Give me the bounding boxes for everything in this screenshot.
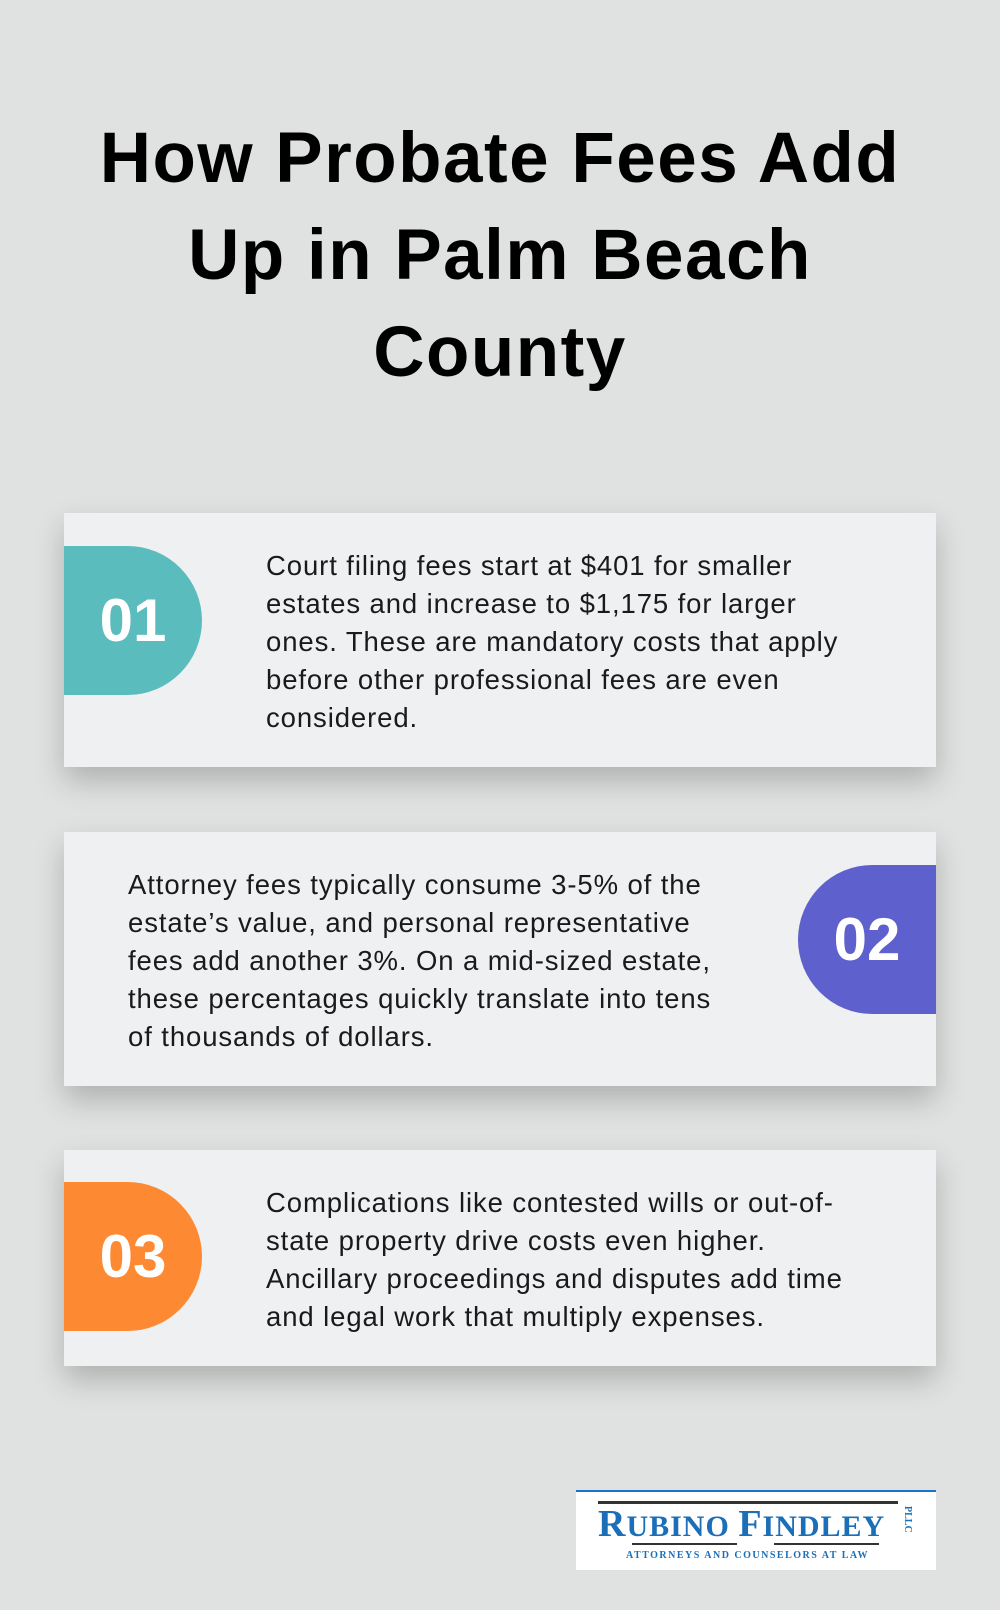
logo text: RUBINO FINDLEY xyxy=(598,1503,885,1545)
badge 03: 03 xyxy=(100,1223,166,1290)
text 2: estate’s value, and personal representative xyxy=(128,907,691,938)
text 1: ones. These are mandatory costs that apply xyxy=(266,626,838,657)
text 3: Ancillary proceedings and disputes add time xyxy=(266,1263,843,1294)
text 2: fees add another 3%. On a mid-sized estate, xyxy=(128,945,711,976)
logo: PLLC xyxy=(902,1506,913,1533)
text 3: Complications like contested wills or out-of- xyxy=(266,1187,834,1218)
panel: card 2 xyxy=(64,832,936,1086)
badge 03 xyxy=(64,1182,202,1331)
badge 02: 02 xyxy=(834,906,900,973)
text 2: these percentages quickly translate into tens xyxy=(128,983,711,1014)
logo: ATTORNEYS AND COUNSELORS AT LAW xyxy=(626,1550,869,1561)
text 2: Attorney fees typically consume 3-5% of the xyxy=(128,869,702,900)
title: County xyxy=(373,313,627,392)
title: How Probate Fees Add xyxy=(100,119,900,198)
text 2 xyxy=(128,869,711,1052)
panel: card 3 xyxy=(64,1150,936,1366)
text 1: considered. xyxy=(266,702,418,733)
text 2: of thousands of dollars. xyxy=(128,1021,434,1052)
text 3: and legal work that multiply expenses. xyxy=(266,1301,765,1332)
panel: card 1 xyxy=(64,513,936,767)
logo xyxy=(576,1490,936,1570)
badge 01: 01 xyxy=(100,587,166,654)
text 1: before other professional fees are even xyxy=(266,664,780,695)
badge 02 xyxy=(798,865,936,1014)
title: Up in Palm Beach xyxy=(188,216,812,295)
text 1: Court filing fees start at $401 for smaller xyxy=(266,550,792,581)
text 1: estates and increase to $1,175 for larger xyxy=(266,588,797,619)
text 3: state property drive costs even higher. xyxy=(266,1225,766,1256)
text 1 xyxy=(266,550,838,733)
text 3 xyxy=(266,1187,843,1332)
badge 01 xyxy=(64,546,202,695)
title xyxy=(100,119,900,392)
